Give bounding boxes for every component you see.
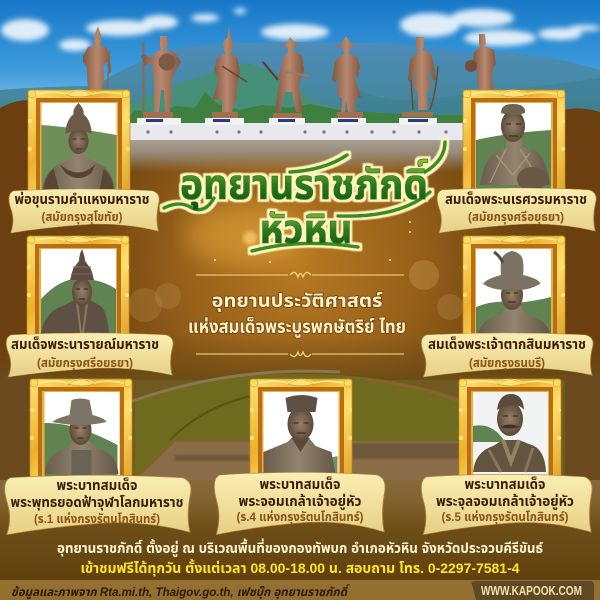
statue: Naresuan: [141, 36, 181, 112]
background: sky and mountains: [0, 0, 600, 135]
frame: Phutthayotfa: [30, 378, 132, 476]
photo: Taksin bust: [476, 249, 551, 337]
background: aerial view of the park: [0, 335, 600, 580]
title: [164, 142, 445, 252]
frame: Rama IV: [250, 378, 352, 474]
opening hours text: เข้าชมฟรีได้ทุกวัน ตั้งแต่เวลา 08.00-18.00 น. สอบถาม โทร. 0-2297-7581-4: [80, 558, 520, 577]
ribbon: Phutthayotfa: พระบาทสมเด็จ: [56, 477, 138, 493]
location text: อุทยานราชภักดิ์ ตั้งอยู่ ณ บริเวณพื้นที่ของกองทัพบก อำเภอหัวหิน จังหวัดประจวบคีรีขันธ์: [57, 538, 543, 558]
frame: Ekathotsarot: [26, 236, 130, 334]
statue: Ekathotsarot: [213, 26, 247, 112]
statue: Phutthayotfa: [332, 36, 361, 112]
ribbon: Phutthayotfa: (ร.1 แห่งกรุงรัตนโกสินทร์): [34, 512, 160, 526]
statue: Chulalongkorn: [465, 34, 496, 90]
ribbon: Naresuan: (สมัยกรุงศรีอยุธยา): [468, 210, 564, 224]
ribbon: Rama IV: พระบาทสมเด็จ: [260, 476, 341, 492]
subtitle: อุทยานประวัติศาสตร์: [212, 291, 383, 312]
statue: Ramkhamhaeng: [83, 26, 111, 90]
photo: Rama IV bust: [264, 392, 338, 480]
ribbon: Rama V: พระบาทสมเด็จ: [464, 476, 546, 492]
ribbon: Rama IV: พระจอมเกล้าเจ้าอยู่หัว: [238, 493, 362, 511]
ribbon: Narai: (สมัยกรุงศรีอยุธยา): [37, 356, 133, 370]
ribbon: Naresuan: สมเด็จพระนเรศวรมหาราช: [445, 191, 587, 207]
ribbon: Rama V: [421, 474, 592, 535]
frame: Taksin: [462, 236, 566, 334]
ribbon: Taksin: [421, 333, 593, 377]
ribbon: Ramkhamhaeng: (สมัยกรุงสุโขทัย): [42, 210, 122, 224]
frame: Ramkhamhaeng: [28, 90, 130, 190]
statue: Mongkut: [408, 37, 438, 110]
ribbon: Rama IV: [214, 472, 385, 535]
photo: Rama V bust: [473, 392, 548, 480]
frame: Rama V: [458, 378, 562, 476]
ribbon: Narai: สมเด็จพระนารายณ์มหาราช: [11, 336, 159, 352]
photo: Phutthayotfa bust: [44, 392, 120, 480]
footer strip: [0, 580, 600, 600]
statue: Taksin: [263, 37, 310, 112]
divider top: [196, 272, 404, 277]
subtitle: แห่งสมเด็จพระบูรพกษัตริย์ ไทย: [188, 315, 406, 338]
ribbon: Taksin: สมเด็จพระเจ้าตากสินมหาราช: [428, 336, 586, 352]
title: อุทยานราชภักดิ์: [180, 158, 428, 210]
frame: Naresuan: [462, 90, 566, 189]
ribbon: Taksin: (สมัยกรุงธนบุรี): [469, 356, 545, 370]
ribbon: Naresuan: [437, 188, 596, 233]
ribbon: Narai: [6, 333, 173, 377]
ribbon: Rama V: พระจุลจอมเกล้าเจ้าอยู่หัว: [436, 493, 574, 511]
ribbon: Rama IV: (ร.4 แห่งกรุงรัตนโกสินทร์): [236, 510, 364, 524]
footer strip: ข้อมูลและภาพจาก Rta.mi.th, Thaigov.go.th, เฟซบุ๊ก อุทยานราชภักดิ์: [11, 584, 351, 600]
ribbon: Phutthayotfa: พระพุทธยอดฟ้าจุฬาโลกมหาราช: [10, 494, 184, 511]
ribbon: Phutthayotfa: [5, 475, 191, 535]
ribbon: Ramkhamhaeng: พ่อขุนรามคำแหงมหาราช: [14, 191, 150, 208]
title: หัวหิน: [260, 208, 352, 252]
statues of the seven kings: [83, 26, 496, 112]
divider bottom: [196, 352, 404, 357]
ribbon: Rama V: (ร.5 แห่งกรุงรัตนโกสินทร์): [442, 510, 568, 524]
photo: Naresuan bust: [476, 103, 551, 191]
background: brown sides and golden centre: [0, 100, 600, 385]
photo: Ramkhamhaeng bust: [42, 103, 116, 191]
subtitle: [188, 291, 406, 338]
monument wall and plinths: [129, 112, 464, 172]
photo: Ekathotsarot bust: [41, 249, 116, 337]
ribbon: Ramkhamhaeng: [9, 189, 159, 233]
